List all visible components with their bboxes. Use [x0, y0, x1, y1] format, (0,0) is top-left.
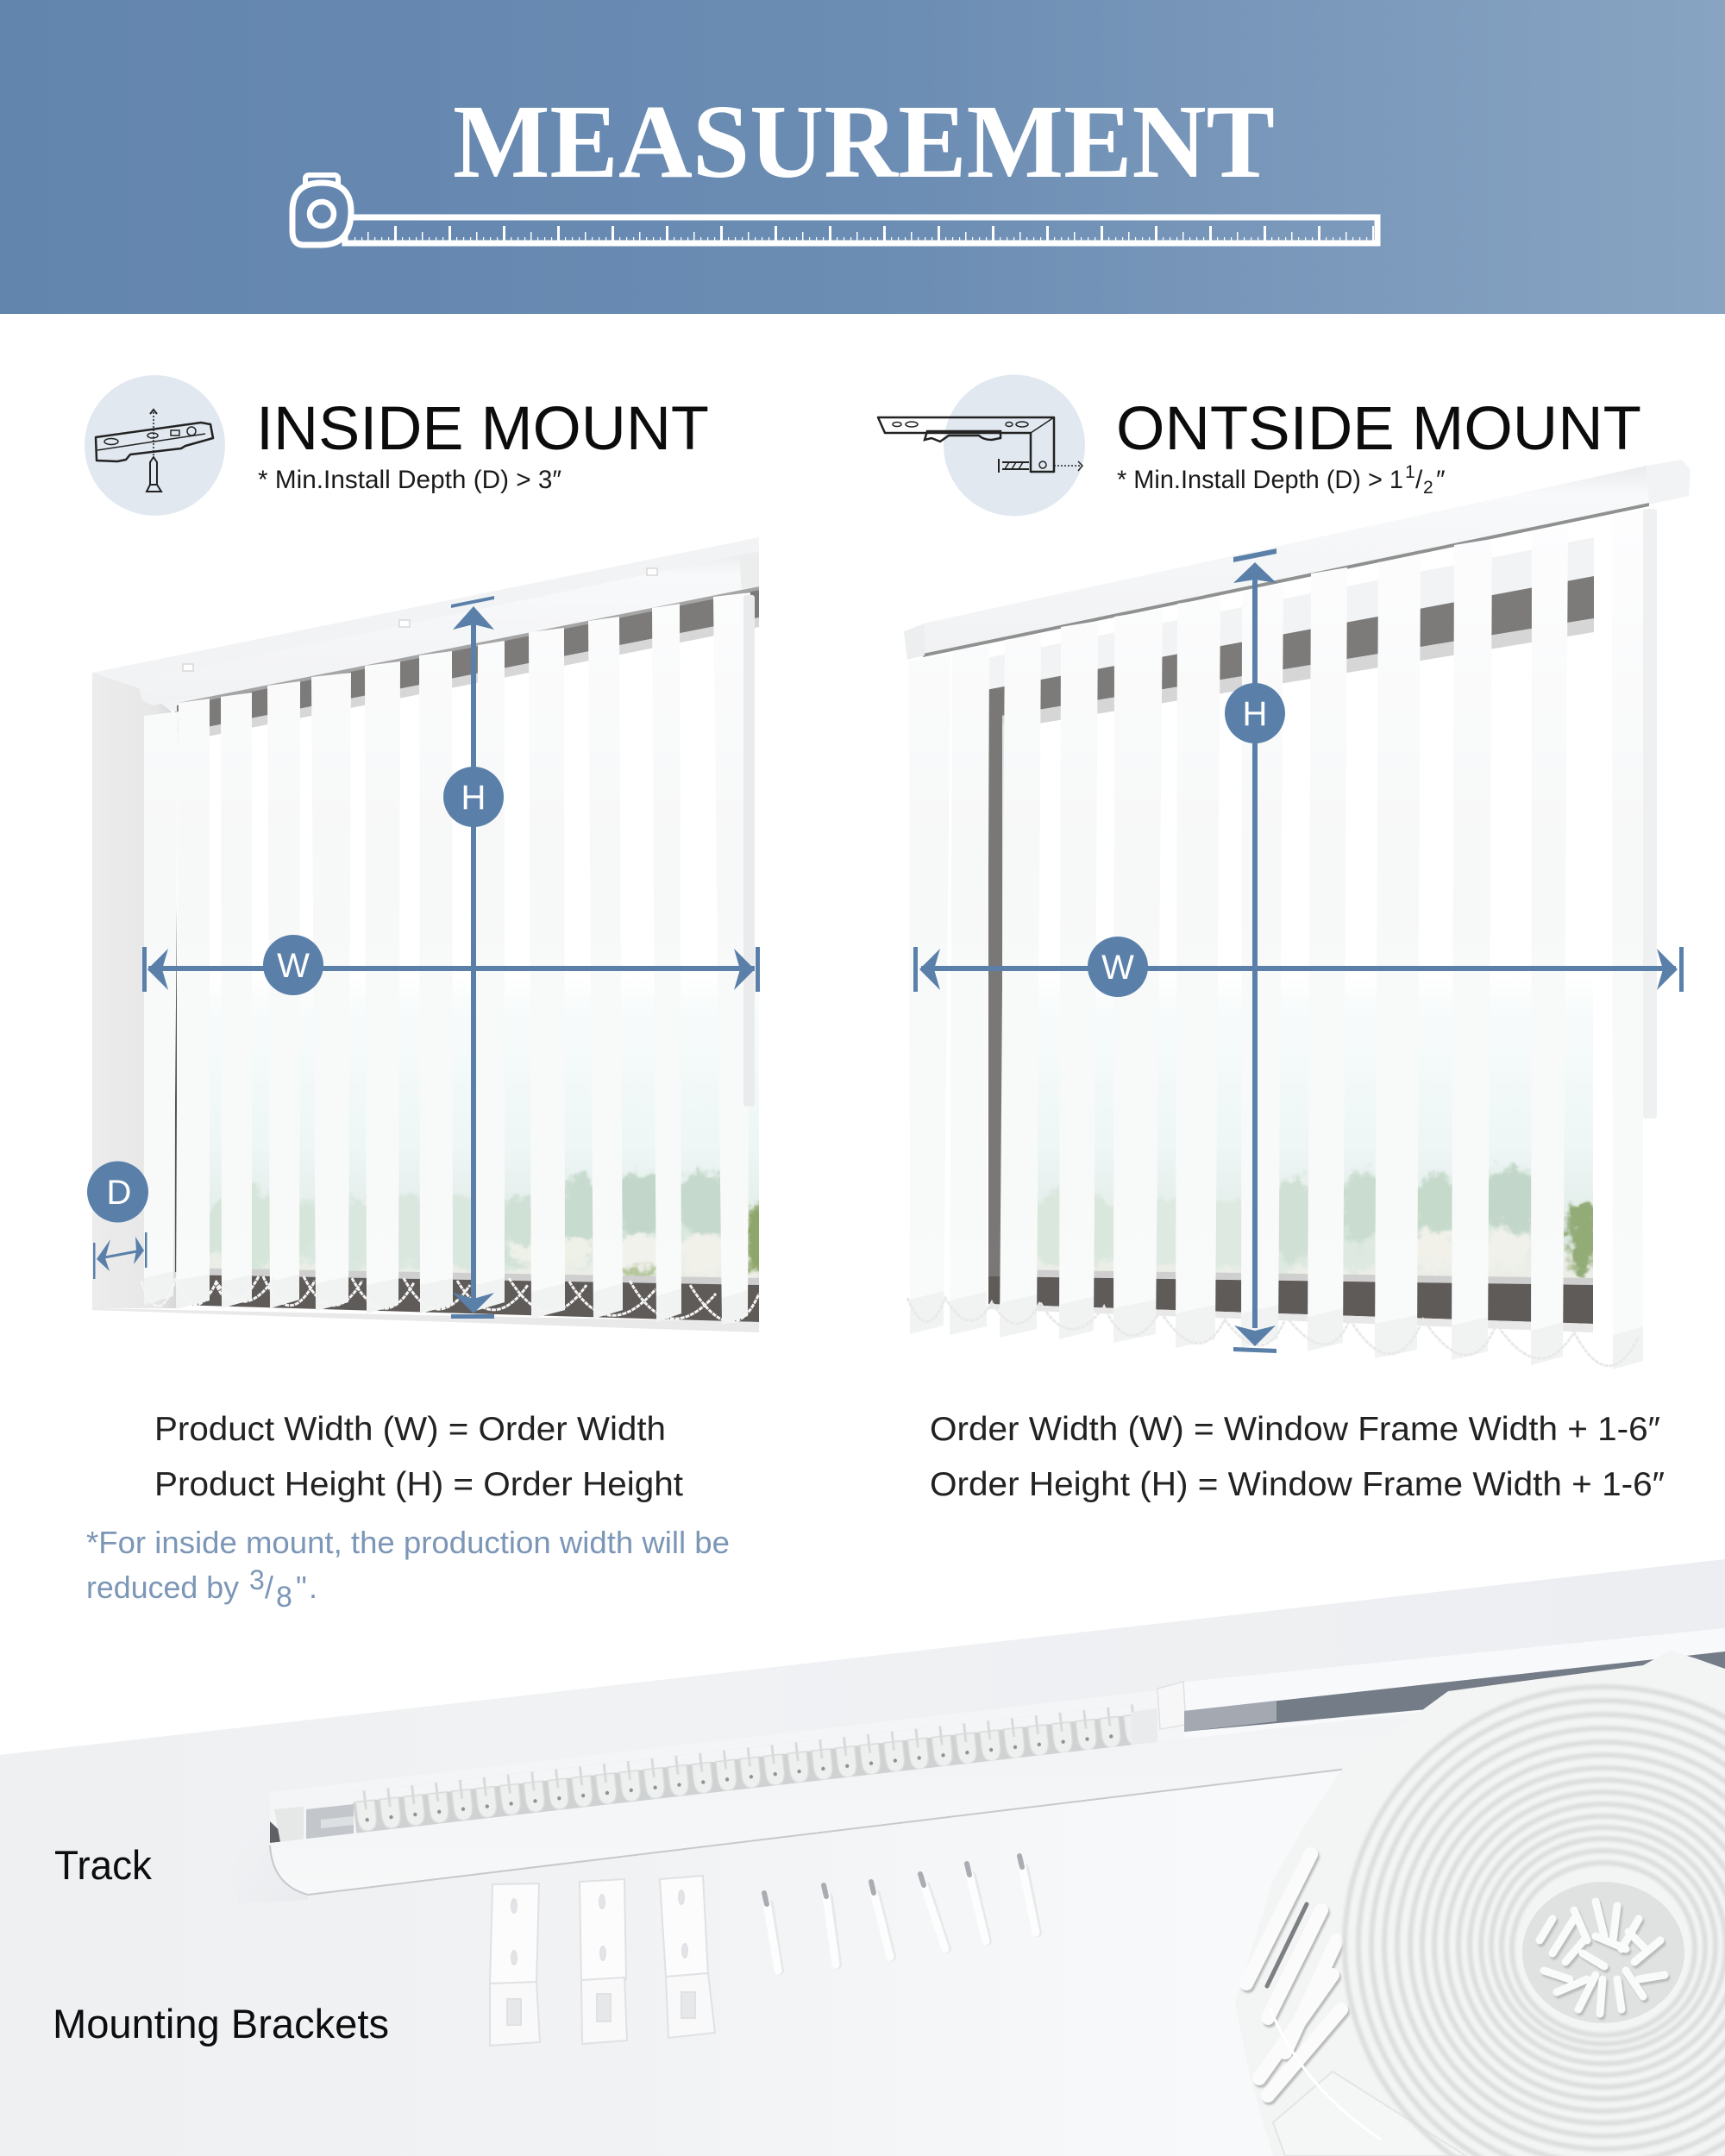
wand — [743, 595, 755, 1106]
sub text: outside depth: 2 — [1423, 478, 1433, 498]
photo: inside mount window with blinds — [92, 537, 773, 1332]
mounting brackets — [490, 1876, 715, 2046]
text block: inside note: reduced by — [86, 1570, 239, 1605]
sub text: inside depth: * Min.Install Depth (D) > 3″ — [258, 466, 561, 494]
badge: outside W: W — [1101, 949, 1134, 987]
vertical slats — [144, 592, 750, 1325]
badge: outside W — [1088, 937, 1148, 997]
slat weights — [910, 1291, 1643, 1369]
photo: outside mount window with blinds — [904, 460, 1690, 1369]
concentric rings — [1345, 1687, 1725, 2156]
carriers — [352, 1704, 1138, 1835]
badge: depth D — [87, 1161, 148, 1223]
sub text: outside depth: * Min.Install Depth (D) > 1 — [1117, 466, 1403, 494]
wand — [1643, 509, 1657, 1119]
badge: outside H: H — [1243, 695, 1267, 733]
icon: inside mount bracket — [85, 375, 225, 516]
outside mount dimension arrows — [913, 548, 1684, 1353]
vertical slats — [909, 509, 1643, 1369]
window frame — [986, 537, 1594, 690]
sub text: outside depth: 1 — [1405, 462, 1415, 482]
cord chain — [141, 1276, 759, 1322]
icon: outside mount bracket — [878, 374, 1085, 516]
text block: outside formula: Order Width (W) = Window Frame Width + 1-6″ — [930, 1411, 1660, 1448]
end cap — [225, 1792, 308, 1903]
text block: inside note: 3 — [249, 1564, 265, 1595]
wall anchors — [764, 1856, 1038, 1971]
track channel — [177, 590, 759, 733]
left wall reveal — [92, 673, 177, 1308]
arrow: outside width — [913, 947, 1684, 992]
label: mounting brackets: Mounting Brackets — [53, 2001, 389, 2046]
text block: outside formula: Order Height (H) = Window Frame Width + 1-6″ — [930, 1466, 1665, 1503]
slat ends pile — [1246, 1854, 1466, 2156]
title: MEASUREMENT — [453, 84, 1275, 200]
window glass scene — [1037, 1024, 1593, 1278]
headrail — [137, 552, 759, 705]
label: track: Track — [54, 1842, 152, 1888]
badge: inside W — [263, 935, 323, 995]
headrail — [923, 466, 1649, 654]
badge: depth D: D — [107, 1174, 131, 1212]
soffit — [92, 537, 759, 711]
text block: outside formula — [930, 1411, 1665, 1503]
badge: inside W: W — [277, 947, 310, 985]
inside mount dimension arrows — [87, 596, 760, 1319]
text block: inside note — [86, 1525, 730, 1614]
photo: components — [0, 1559, 1725, 2156]
interior of track — [270, 1690, 1184, 1843]
sub text: outside depth: / — [1415, 466, 1423, 494]
icon: measuring tape — [292, 175, 1377, 245]
tube and clip — [1187, 1628, 1725, 1709]
roll centre — [1522, 1882, 1684, 2023]
text block: inside formula — [154, 1411, 683, 1503]
text block: inside note: 8 — [276, 1581, 292, 1614]
slat weights — [144, 1271, 748, 1325]
text block: inside formula: Product Width (W) = Order Width — [154, 1411, 666, 1448]
arrow: inside width — [142, 947, 760, 992]
arrow: inside height — [451, 596, 494, 1319]
sill — [177, 1268, 759, 1285]
outside mount heading — [878, 374, 1641, 516]
text block: inside note: . — [309, 1570, 317, 1605]
track — [0, 1559, 1725, 1903]
heading: inside mount: INSIDE MOUNT — [256, 395, 709, 463]
heading: outside mount: ONTSIDE MOUNT — [1116, 395, 1641, 463]
text block: inside formula: Product Height (H) = Order Height — [154, 1466, 683, 1503]
arrow: outside height — [1233, 548, 1276, 1353]
inside mount heading — [85, 375, 709, 516]
badge: inside H — [443, 767, 504, 827]
badge: outside H — [1225, 683, 1285, 743]
arrow: depth — [93, 1232, 147, 1279]
text block: inside note: " — [296, 1570, 307, 1605]
window glass scene — [210, 1024, 759, 1278]
sill — [1002, 1269, 1593, 1285]
rolled slats — [1235, 1651, 1725, 2156]
text block: inside note: *For inside mount, the production width will be — [86, 1525, 730, 1560]
slot — [1184, 1651, 1725, 1732]
header banner — [0, 0, 1725, 314]
badge: inside H: H — [461, 779, 486, 817]
cord chain — [907, 1298, 1639, 1366]
sub text: outside depth: ″ — [1436, 466, 1446, 494]
text block: inside note: / — [265, 1570, 273, 1605]
front face — [270, 1677, 1725, 1895]
